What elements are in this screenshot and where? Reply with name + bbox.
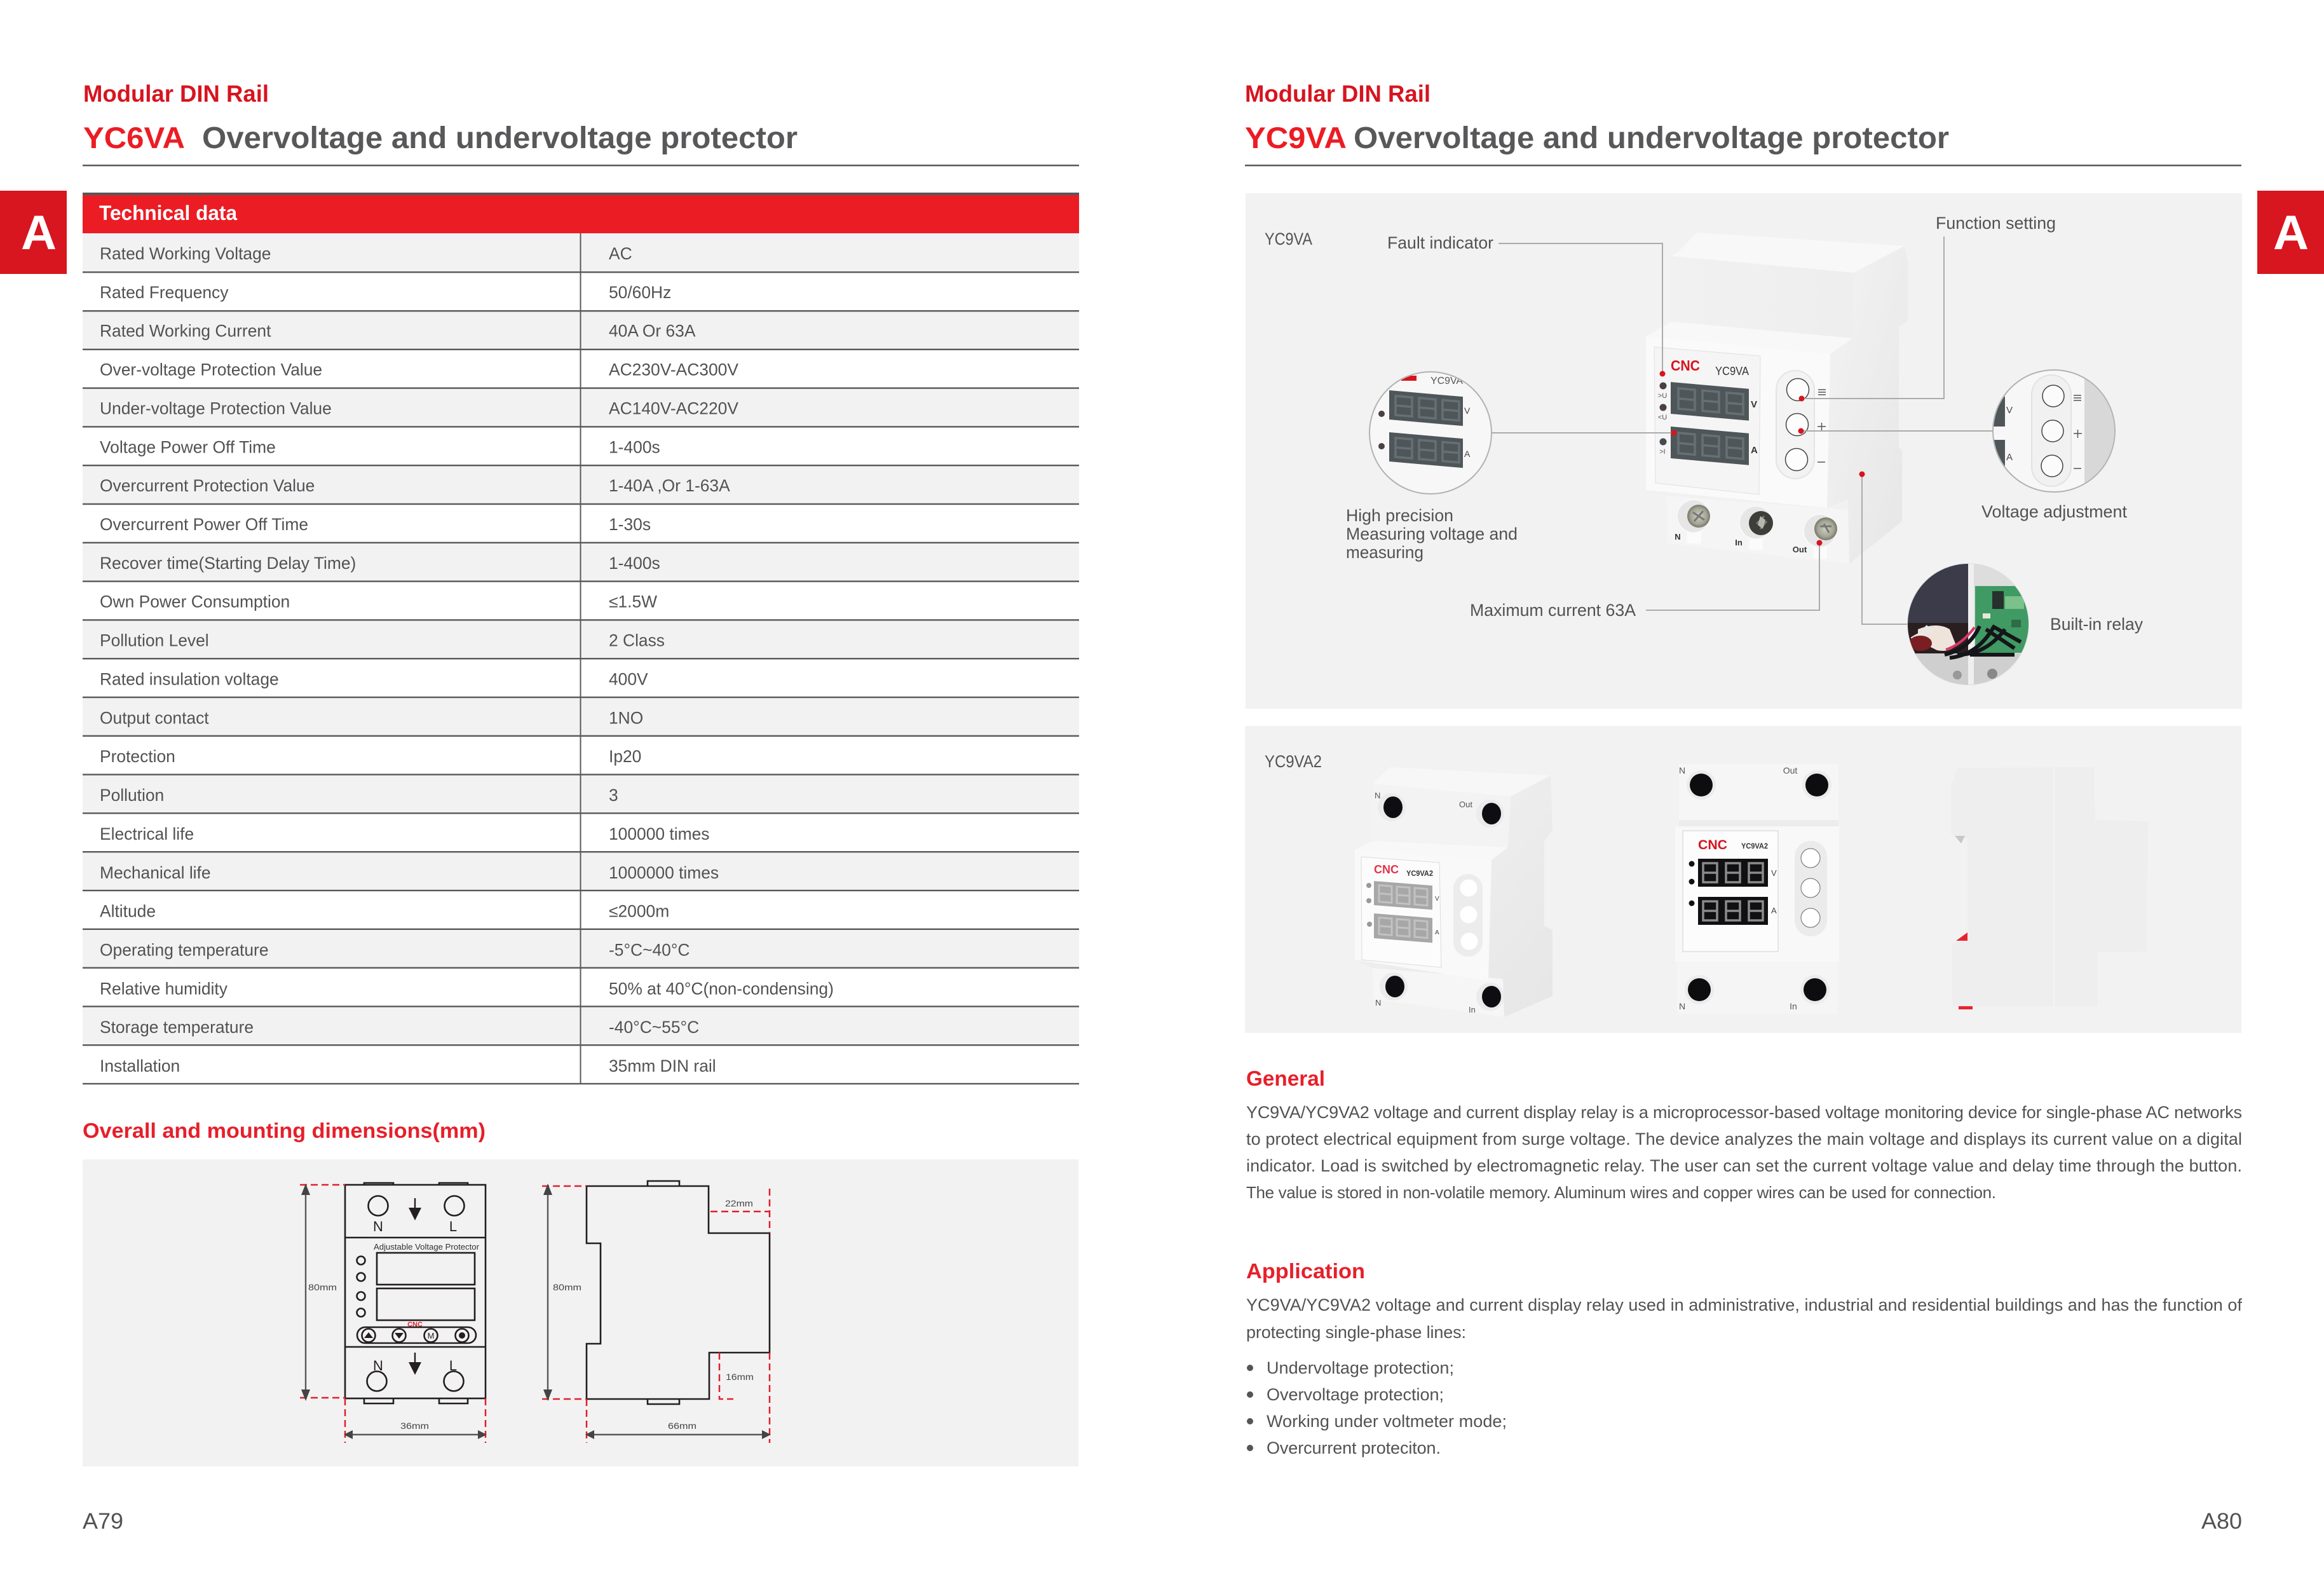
heading: right page: YC9VA <box>1245 121 1347 155</box>
product photo: YC9VA device: In <box>1735 538 1743 547</box>
drawing: front view <box>345 1183 486 1403</box>
product photo: YC9VA2 angled view: N <box>1375 791 1380 800</box>
table text: 1NO <box>609 708 643 727</box>
callout: fault indicator: Fault indicator <box>1387 233 1493 252</box>
table: technical data <box>83 193 1079 1084</box>
product photo: YC9VA2 front view: CNC <box>1698 838 1727 852</box>
dimension: 80mm, 22mm, 16mm and 66mm: 22mm <box>725 1198 753 1208</box>
section tab: A left <box>0 191 67 274</box>
callout: function setting <box>1798 214 2056 402</box>
table text: Overcurrent Power Off Time <box>100 515 308 534</box>
product photo: YC9VA2 angled view: V <box>1435 896 1439 903</box>
table text: 35mm DIN rail <box>609 1056 716 1075</box>
table text: ≤1.5W <box>609 592 657 611</box>
table text: Altitude <box>100 902 156 921</box>
product photo: YC9VA device: V <box>1751 399 1757 410</box>
product photo: YC9VA2 angled view <box>1355 767 1553 1017</box>
callout: function setting: Function setting <box>1936 214 2056 233</box>
heading: left page <box>83 81 1079 167</box>
table rules <box>83 233 1079 1084</box>
table text: AC230V-AC300V <box>609 360 738 379</box>
panel: YC9VA2 views <box>1245 726 2241 1033</box>
table row stripes <box>83 233 1079 1045</box>
callout: maximum current <box>1470 540 1823 620</box>
text: high precision: Measuring voltage and <box>1346 524 1518 543</box>
product photo: YC9VA2 angled view: A <box>1435 929 1439 936</box>
callout: maximum current: Maximum current 63A <box>1470 601 1636 620</box>
drawing: front view: M <box>428 1331 434 1341</box>
section tab: A left: A <box>21 206 57 260</box>
heading: left page: Modular DIN Rail <box>83 81 269 107</box>
callout: fault indicator <box>1387 233 1665 376</box>
page number: A80: A80 <box>2201 1509 2242 1534</box>
text: high precision: High precision <box>1346 506 1453 525</box>
table text: Rated insulation voltage <box>100 670 279 689</box>
text: built-in relay: Built-in relay <box>2050 615 2143 634</box>
product photo: YC9VA device <box>1646 233 1908 564</box>
product photo: YC9VA device: <U <box>1658 414 1667 421</box>
dimension: 80mm, 22mm, 16mm and 66mm: 80mm <box>553 1282 581 1292</box>
table text: Electrical life <box>100 824 194 843</box>
product photo: YC9VA2 front view: N <box>1679 1001 1685 1011</box>
table text: 100000 times <box>609 824 709 843</box>
table header: Technical data <box>99 201 237 224</box>
drawing: side view <box>587 1181 770 1404</box>
table text: Recover time(Starting Delay Time) <box>100 554 356 573</box>
page number: A79: A79 <box>83 1509 123 1534</box>
product photo: YC9VA2 angled view: YC9VA2 <box>1406 869 1433 878</box>
product photo: YC9VA device: A <box>1751 445 1758 456</box>
dimension: 80mm and 36mm: 80mm <box>308 1282 337 1292</box>
heading: left page: Overvoltage and undervoltage protector <box>202 121 798 155</box>
product photo: YC9VA2 front view: V <box>1771 868 1777 878</box>
product photo: YC9VA2 angled view: Out <box>1459 800 1472 809</box>
heading: general: General <box>1246 1067 1325 1090</box>
label: YC9VA2: YC9VA2 <box>1265 752 1322 771</box>
table text: -40°C~55°C <box>609 1018 699 1037</box>
dimension: 80mm, 22mm, 16mm and 66mm: 16mm <box>726 1372 754 1382</box>
table text: Output contact <box>100 708 209 727</box>
product photo: YC9VA2 front view: In <box>1790 1001 1797 1011</box>
table text: Overcurrent Protection Value <box>100 476 315 495</box>
text block: application: YC9VA/YC9VA2 voltage and current display relay used in administrative, industrial and residential buildings and has the function of <box>1246 1295 2242 1314</box>
drawing: front view: L <box>449 1358 457 1374</box>
callout: high precision measuring inset: V <box>1464 406 1471 416</box>
callout: voltage adjustment inset <box>1798 369 2123 496</box>
callout: voltage adjustment inset: V <box>2006 405 2013 416</box>
table text: Under-voltage Protection Value <box>100 399 332 418</box>
product photo: YC9VA device: >I <box>1659 448 1666 456</box>
text block: general: The value is stored in non-volatile memory. Aluminum wires and copper wires can be used for connection. <box>1246 1183 1996 1202</box>
text block: general: YC9VA/YC9VA2 voltage and current display relay is a microprocessor-based voltage monitoring device for single-phase AC networks <box>1246 1103 2242 1122</box>
heading: right page <box>1245 81 2241 167</box>
table text: Voltage Power Off Time <box>100 437 276 456</box>
heading: application: Application <box>1246 1259 1365 1283</box>
bullet list: protections <box>1247 1358 1507 1458</box>
table text: 1000000 times <box>609 863 719 882</box>
heading: left page: YC6VA <box>83 121 185 155</box>
table text: AC140V-AC220V <box>609 399 738 418</box>
text: voltage adjustment: Voltage adjustment <box>1981 502 2127 521</box>
drawing: front view: Adjustable Voltage Protector <box>374 1243 479 1252</box>
table text: 1-400s <box>609 437 660 456</box>
product photo: YC9VA2 front view <box>1675 764 1839 1014</box>
table text: Relative humidity <box>100 979 228 998</box>
table text: AC <box>609 244 632 263</box>
heading: dimensions: Overall and mounting dimensions(mm) <box>83 1119 486 1142</box>
product photo: YC9VA2 angled view: N <box>1375 998 1381 1007</box>
product photo: YC9VA2 angled view: CNC <box>1374 863 1399 876</box>
product photo: YC9VA2 front view: A <box>1771 906 1777 915</box>
table text: 1-40A ,Or 1-63A <box>609 476 730 495</box>
callout: high precision measuring inset <box>1369 372 1676 494</box>
table text: 1-400s <box>609 554 660 573</box>
section tab: A right <box>2257 191 2324 274</box>
table text: 50/60Hz <box>609 283 671 302</box>
callout: high precision measuring inset: YC9VA <box>1430 376 1464 386</box>
dimension: 80mm and 36mm <box>300 1184 487 1443</box>
text block: general: to protect electrical equipment from surge voltage. The device analyzes the main voltage and displays its current value on a digital <box>1246 1130 2242 1149</box>
product photo: YC9VA2 front view: N <box>1679 765 1685 775</box>
table text: Rated Working Current <box>100 322 271 341</box>
drawing: front view: N <box>373 1219 383 1234</box>
table text: ≤2000m <box>609 902 669 921</box>
table text: Pollution <box>100 786 164 805</box>
product photo: YC9VA2 angled view: In <box>1469 1005 1476 1014</box>
table text: Storage temperature <box>100 1018 254 1037</box>
table text: Pollution Level <box>100 631 209 650</box>
product photo: YC9VA device: >U <box>1658 392 1667 400</box>
dimension: 80mm, 22mm, 16mm and 66mm: 66mm <box>668 1421 697 1431</box>
text block: general <box>1246 1103 2242 1202</box>
product photo: YC9VA2 front view: Out <box>1783 765 1797 775</box>
drawing: front view: N <box>373 1358 383 1374</box>
text block: application: protecting single-phase lines: <box>1246 1323 1466 1342</box>
heading: right page: Overvoltage and undervoltage protector <box>1354 121 1949 155</box>
table text: Rated Frequency <box>100 283 229 302</box>
callout: voltage adjustment inset: A <box>2006 452 2013 463</box>
product photo: YC9VA device: CNC <box>1671 357 1700 374</box>
heading: right page: Modular DIN Rail <box>1245 81 1430 107</box>
dimension: 80mm and 36mm: 36mm <box>400 1421 429 1431</box>
product photo: YC9VA device: Out <box>1793 545 1807 554</box>
table text: Protection <box>100 747 175 766</box>
table text: 1-30s <box>609 515 651 534</box>
text: high precision <box>1346 506 1518 562</box>
table text: Rated Working Voltage <box>100 244 271 263</box>
text block: general: indicator. Load is switched by electromagnetic relay. The user can set the current voltage value and delay time through the button. <box>1246 1156 2242 1175</box>
callout: built-in relay inset <box>1859 472 2034 690</box>
product photo: YC9VA2 side view <box>1951 767 2148 1009</box>
bullet list: protections: Overcurrent proteciton. <box>1267 1438 1441 1458</box>
table text: 50% at 40°C(non-condensing) <box>609 979 834 998</box>
drawing: front view: L <box>449 1219 457 1234</box>
table text: -5°C~40°C <box>609 941 690 960</box>
product photo: YC9VA device: YC9VA <box>1715 365 1749 378</box>
table text: Operating temperature <box>100 941 269 960</box>
drawing: front view: CNC <box>407 1321 423 1328</box>
panel: YC9VA callouts <box>1246 193 2242 709</box>
text block: application <box>1246 1295 2242 1342</box>
table text: Mechanical life <box>100 863 211 882</box>
panel: dimension drawings <box>83 1159 1078 1466</box>
table text: Installation <box>100 1056 180 1075</box>
table text: Own Power Consumption <box>100 592 290 611</box>
text: high precision: measuring <box>1346 543 1424 562</box>
table text: 2 Class <box>609 631 665 650</box>
table text: 400V <box>609 670 648 689</box>
product photo: YC9VA device: N <box>1675 532 1681 542</box>
product photo: YC9VA2 front view: YC9VA2 <box>1741 842 1768 850</box>
table text: Ip20 <box>609 747 641 766</box>
bullet list: protections: Overvoltage protection; <box>1267 1385 1444 1404</box>
dimension: 80mm, 22mm, 16mm and 66mm <box>542 1184 771 1443</box>
table text <box>100 244 834 1075</box>
section tab: A right: A <box>2273 206 2309 260</box>
label: YC9VA: YC9VA <box>1265 229 1312 249</box>
table text: Over-voltage Protection Value <box>100 360 322 379</box>
table text: 3 <box>609 786 618 805</box>
table text: 40A Or 63A <box>609 322 696 341</box>
table header <box>83 193 1079 233</box>
bullet list: protections: Working under voltmeter mode; <box>1267 1412 1507 1431</box>
callout: high precision measuring inset: A <box>1464 449 1471 459</box>
bullet list: protections: Undervoltage protection; <box>1267 1358 1454 1377</box>
